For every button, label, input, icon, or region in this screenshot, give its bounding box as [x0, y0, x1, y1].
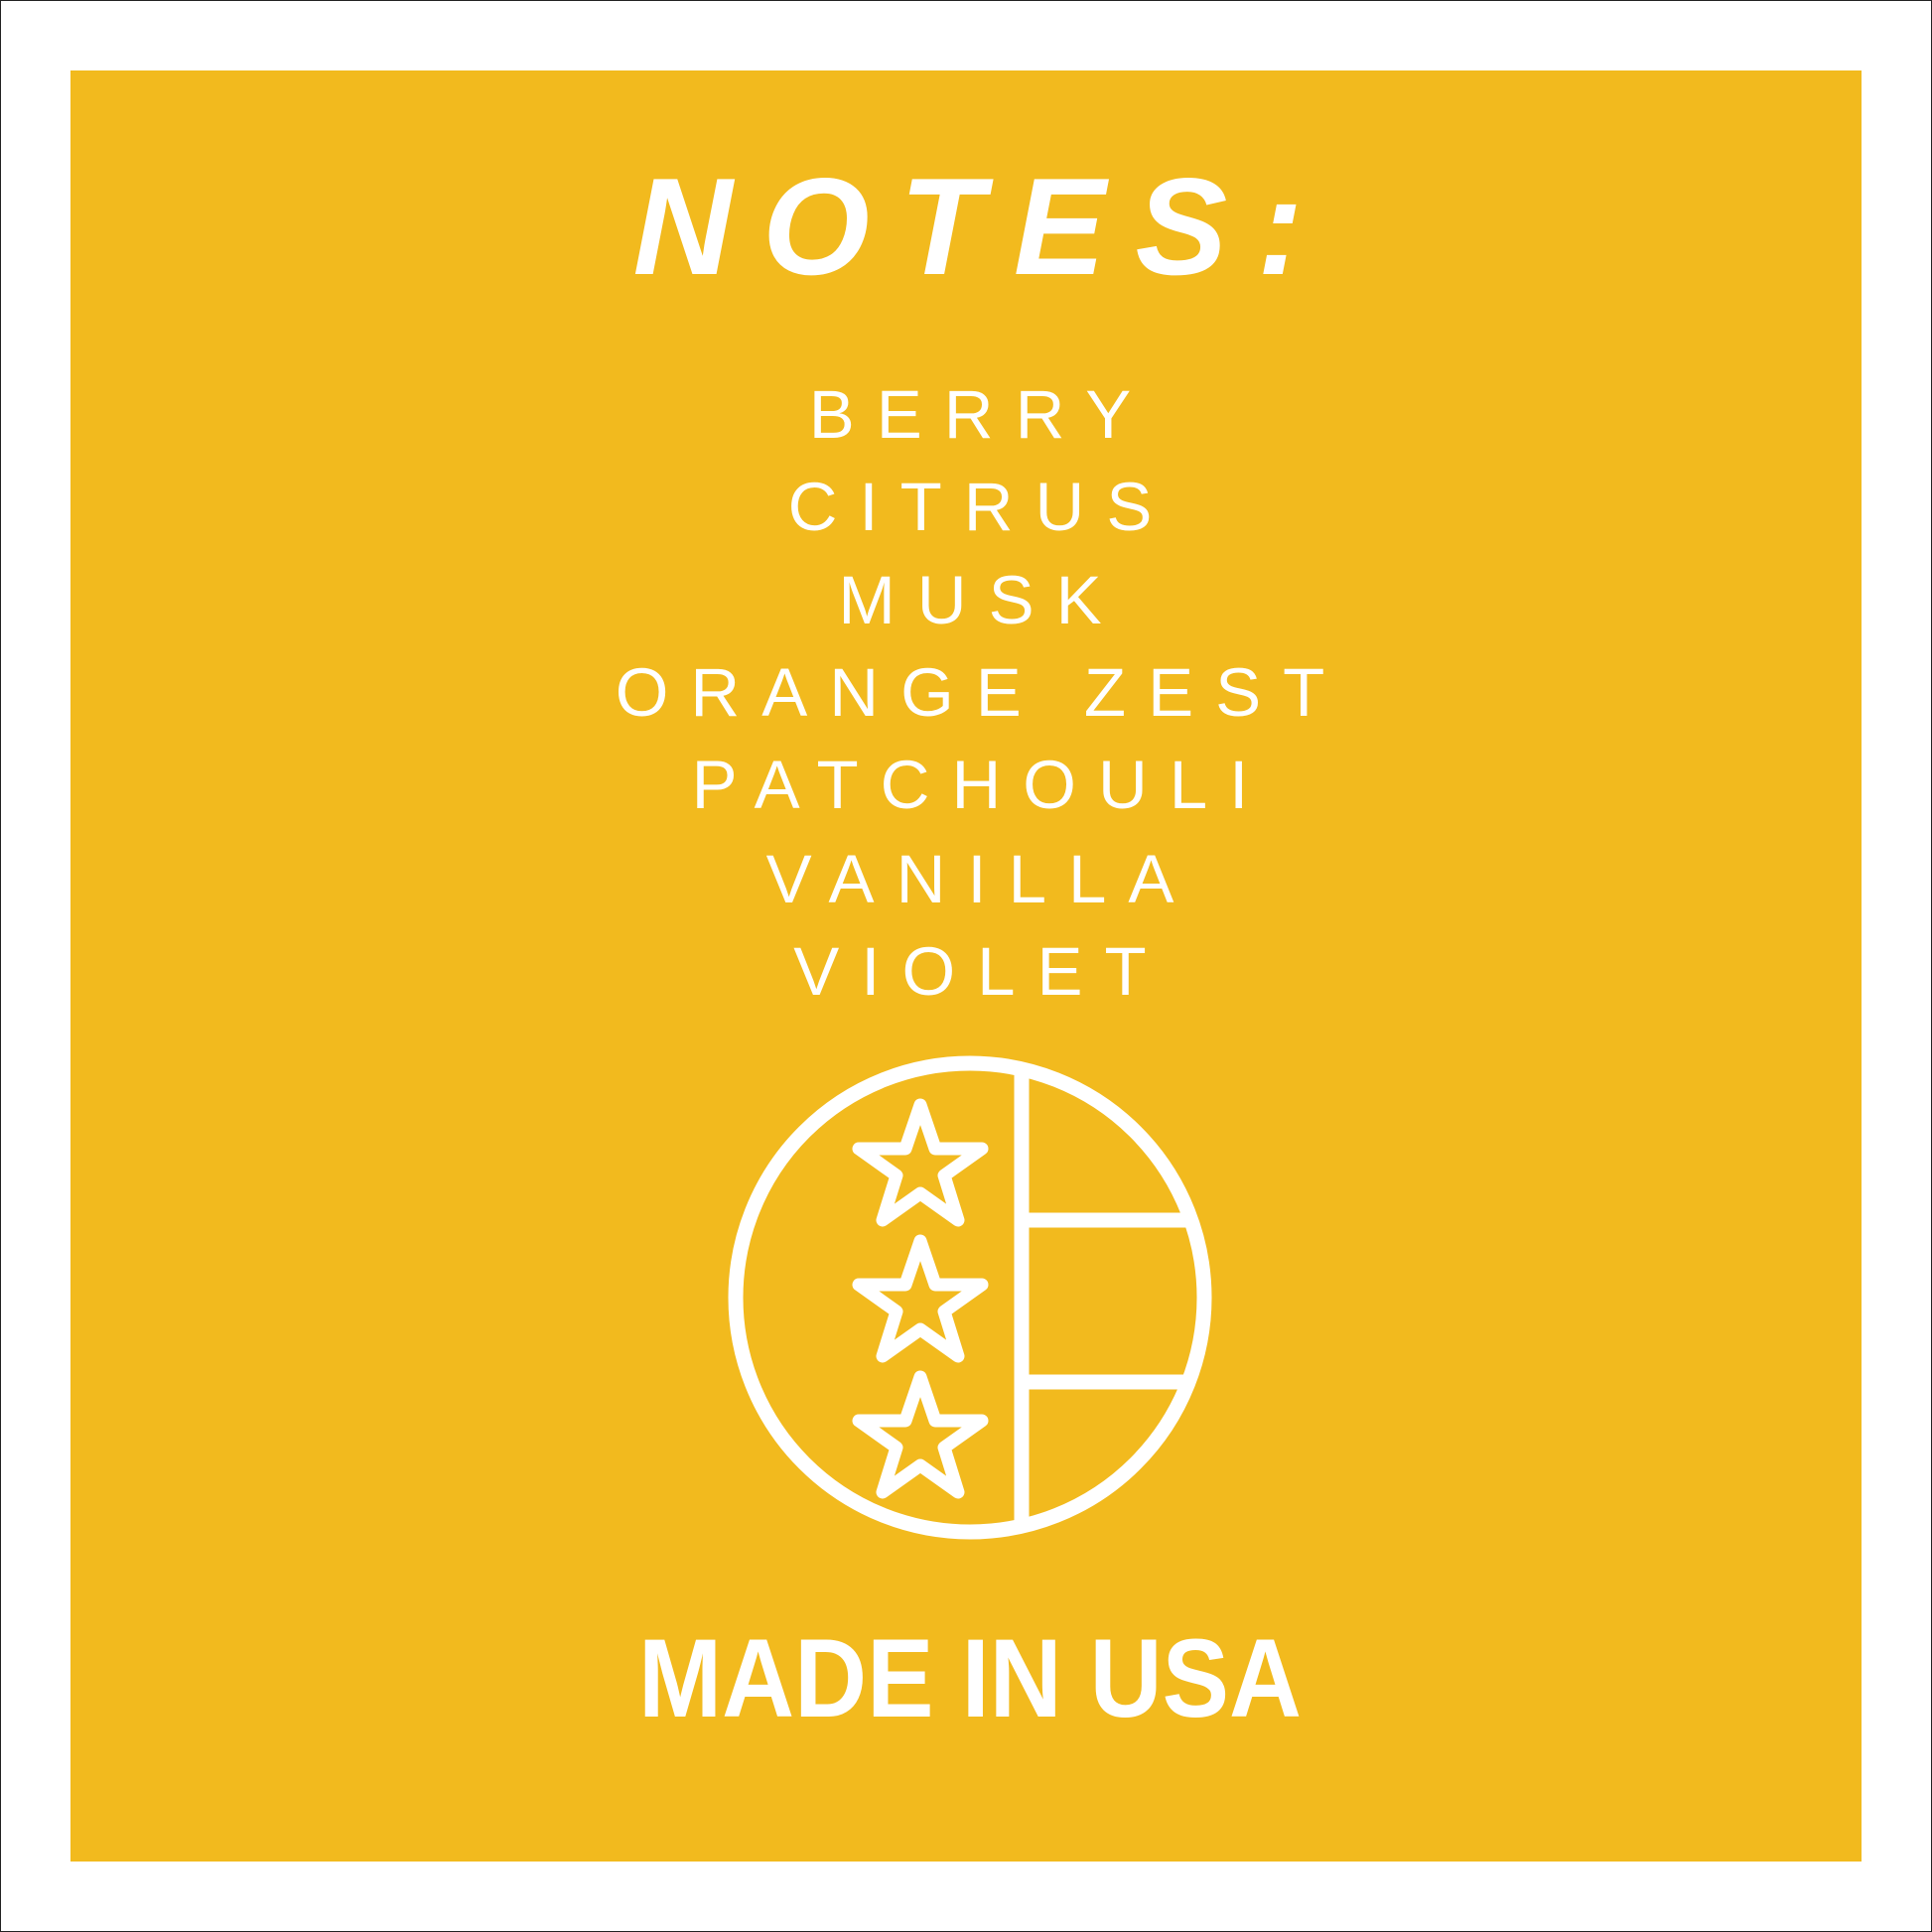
notes list [616, 376, 1346, 1010]
stars [859, 1105, 982, 1220]
title: NOTES: [632, 150, 1333, 304]
icon: circle with stars and stripes [736, 1052, 1221, 1549]
notes list: VANILLA [766, 841, 1195, 917]
notes list: BERRY [809, 376, 1153, 453]
notes list: VIOLET [793, 933, 1169, 1010]
notes list: MUSK [838, 562, 1124, 638]
graphic [619, 178, 1323, 1718]
notes list: CITRUS [788, 469, 1173, 545]
made in usa: MADE IN USA [638, 1616, 1302, 1740]
notes list: ORANGE ZEST [616, 654, 1346, 731]
notes list: PATCHOULI [692, 747, 1270, 823]
